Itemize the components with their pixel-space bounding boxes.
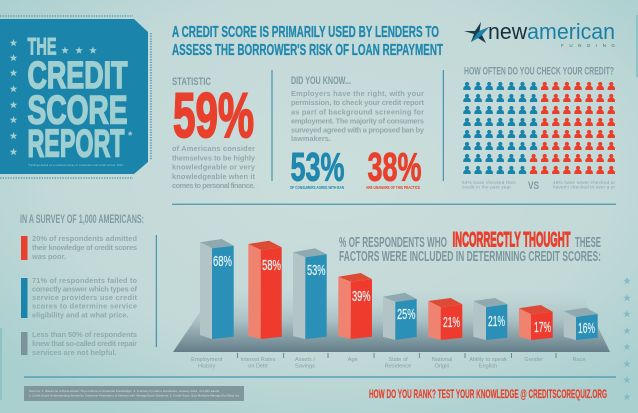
text: employers paragraph: surveyed agreed with a proposed ban by [291, 126, 425, 135]
divider survey [156, 235, 157, 347]
panel: survey [20, 214, 144, 357]
caption: checked: credit in the past year [462, 184, 511, 190]
caption: never checked: haven't checked in over a yr [553, 184, 615, 190]
text: employers paragraph: employment. The majority of consumers [291, 116, 424, 126]
axis labels: Interest Rates [241, 357, 276, 363]
axis labels: Gender [524, 357, 543, 363]
pictogram: red people [530, 82, 615, 174]
axis labels: Race [572, 357, 586, 363]
axis labels: Age [348, 357, 358, 363]
caption: never checked: 46% have never checked or [553, 180, 615, 185]
fine print: *Findings based on a national survey of consumers and credit scores, 2012 [28, 163, 124, 167]
text: employers paragraph: permission, to check your credit report [291, 98, 425, 107]
chart floor [173, 290, 610, 352]
text: 71%: service providers use credit [32, 293, 138, 302]
bar: ability to speak english 21%: 21% [488, 313, 505, 330]
bar: state of residence 25% [383, 293, 417, 340]
axis labels: Origin [435, 364, 449, 370]
text: less than 50% [32, 330, 137, 357]
axis labels [191, 357, 586, 370]
heading: credit: CREDIT [28, 55, 128, 97]
text: 20%: was poor. [31, 252, 66, 261]
caption: checked [462, 180, 516, 190]
chart heading: % OF RESPONDENTS WHO [339, 235, 447, 251]
icon: right stars column [623, 277, 631, 400]
text: statistic description: knowledgeable or very [172, 163, 256, 172]
stat: 38% [366, 146, 422, 190]
text: 20%: their knowledge of credit scores [32, 243, 137, 252]
axis ticks [238, 353, 556, 358]
axis labels: State of [388, 357, 408, 363]
text: employers paragraph: as part of background screening for [291, 107, 424, 116]
stat: 38%: 38% [368, 146, 422, 190]
text: statistic description: themselves to be highly [172, 153, 256, 162]
bar chart [173, 239, 610, 370]
text: funding: FUNDING [561, 43, 615, 48]
bar: ability to speak english 21% [473, 298, 507, 340]
caption: checked: 54% have checked their [462, 180, 516, 185]
stat: 38%: ARE UNAWARE OF THIS PRACTICE [366, 185, 420, 190]
text: less than 50%: services are not helpful. [32, 348, 117, 357]
axis labels: English [479, 364, 497, 370]
marker: grey [21, 332, 28, 355]
text: statistic description: of Americans consider [172, 144, 255, 153]
chart heading: THESE [575, 235, 601, 251]
bar: employment history 68% [200, 239, 234, 339]
text: 71% [32, 276, 138, 320]
text: 71%: eligibility and at what price. [32, 310, 129, 320]
heading: statistic: STATISTIC [172, 76, 211, 88]
bar: race 16% [564, 308, 598, 340]
pictogram: blue people [463, 82, 537, 174]
heading: report: REPORT [28, 122, 125, 166]
text: employers paragraph: lawmakers. [291, 134, 331, 143]
text: less than 50%: Less than 50% of respondents [32, 330, 137, 339]
panel: how often do you check your credit [462, 66, 615, 192]
asterisk: * [128, 130, 133, 142]
heading: survey: IN A SURVEY OF 1,000 AMERICANS: [20, 214, 144, 226]
text: 71%: 71% of respondents failed to [32, 276, 137, 285]
bar: age 39%: 39% [352, 288, 370, 305]
axis labels: Residence [385, 364, 411, 370]
caption: never checked [553, 180, 615, 190]
panel: title badge [0, 16, 151, 178]
heading: the: THE [28, 34, 56, 60]
stat: 53%: 53% [290, 146, 344, 190]
text: employers paragraph: Employers have the right, with your [291, 89, 424, 98]
text: employers paragraph [291, 89, 425, 143]
bar: state of residence 25%: 25% [397, 306, 416, 323]
axis labels: on Debt [248, 364, 268, 370]
bar: national origin 21% [428, 298, 462, 340]
label: vs: VS [528, 180, 539, 192]
text: less than 50%: knew that so-called credit repair [32, 339, 137, 348]
heading: did you know: DID YOU KNOW... [291, 75, 351, 87]
panel: did you know [290, 75, 425, 190]
axis labels: Ability to speak [469, 357, 507, 363]
axis labels: Employment [191, 357, 223, 363]
text: 71%: scores to determine service [32, 302, 137, 311]
marker: blue [21, 278, 28, 318]
icon: stars row [61, 46, 97, 54]
edge strip top right [636, 15, 638, 77]
footnote box: 2. Credit Score Understanding Survey by Consumer Federation of America with VantageScore Solutions. 3. Credit Score Quiz Methods Managed by Ebay Inc. [29, 394, 240, 398]
text: logo wordmark: newamerican [488, 19, 615, 44]
big number: 59%: 59% [173, 81, 254, 151]
bar: gender 17%: 17% [534, 319, 551, 336]
bar: assets 53% [293, 248, 327, 339]
panel: statistic [172, 76, 256, 190]
marker: red [21, 236, 28, 260]
divider left [272, 70, 273, 181]
edge strip bottom left [0, 328, 2, 400]
bar: employment history 68%: 68% [213, 253, 232, 270]
axis labels: Assets / [295, 357, 315, 363]
stat: 53%: OF CONSUMERS AGREE WITH BAN [290, 185, 344, 190]
footnote box [24, 386, 244, 401]
text: statistic description [172, 144, 256, 190]
heading: score: SCORE [28, 88, 128, 132]
stat: 53% [290, 146, 344, 190]
bar: race 16%: 16% [578, 320, 595, 337]
divider horizontal top [172, 204, 616, 205]
text: statistic description: comes to personal finance. [172, 181, 255, 190]
headline [172, 24, 443, 59]
text: statistic description: knowledgeable when it [172, 172, 256, 181]
divider bottom [24, 376, 616, 378]
axis labels: History [198, 364, 216, 370]
headline: ASSESS THE BORROWER'S RISK OF LOAN REPAYMENT [172, 42, 443, 59]
text: 71%: correctly answer which types of [32, 284, 138, 294]
chart heading [339, 228, 601, 265]
axis labels: Savings [295, 364, 315, 370]
icon: logo star [464, 22, 489, 43]
footnote box: Sources: 1. Based on a Press Article "Top Lenders on Financial Knowledge". 2. A survey by Harris Interactive, January 2012, n=1,000 adults [29, 389, 220, 393]
bar: gender 17% [519, 305, 553, 340]
bar: interest rates 58%: 58% [262, 257, 281, 274]
text: 20%: 20% of respondents admitted [32, 234, 137, 243]
bar: interest rates 58% [248, 241, 282, 339]
axis labels: National [432, 357, 452, 363]
text: 20% [31, 234, 137, 261]
divider right [443, 70, 444, 181]
logo: new american funding [464, 19, 615, 48]
headline: A CREDIT SCORE IS PRIMARILY USED BY LENDERS TO [172, 24, 439, 41]
icon: stars column [10, 39, 17, 155]
bar: assets 53%: 53% [307, 262, 326, 279]
bar: age 39% [338, 273, 372, 339]
bar: national origin 21%: 21% [443, 314, 460, 331]
